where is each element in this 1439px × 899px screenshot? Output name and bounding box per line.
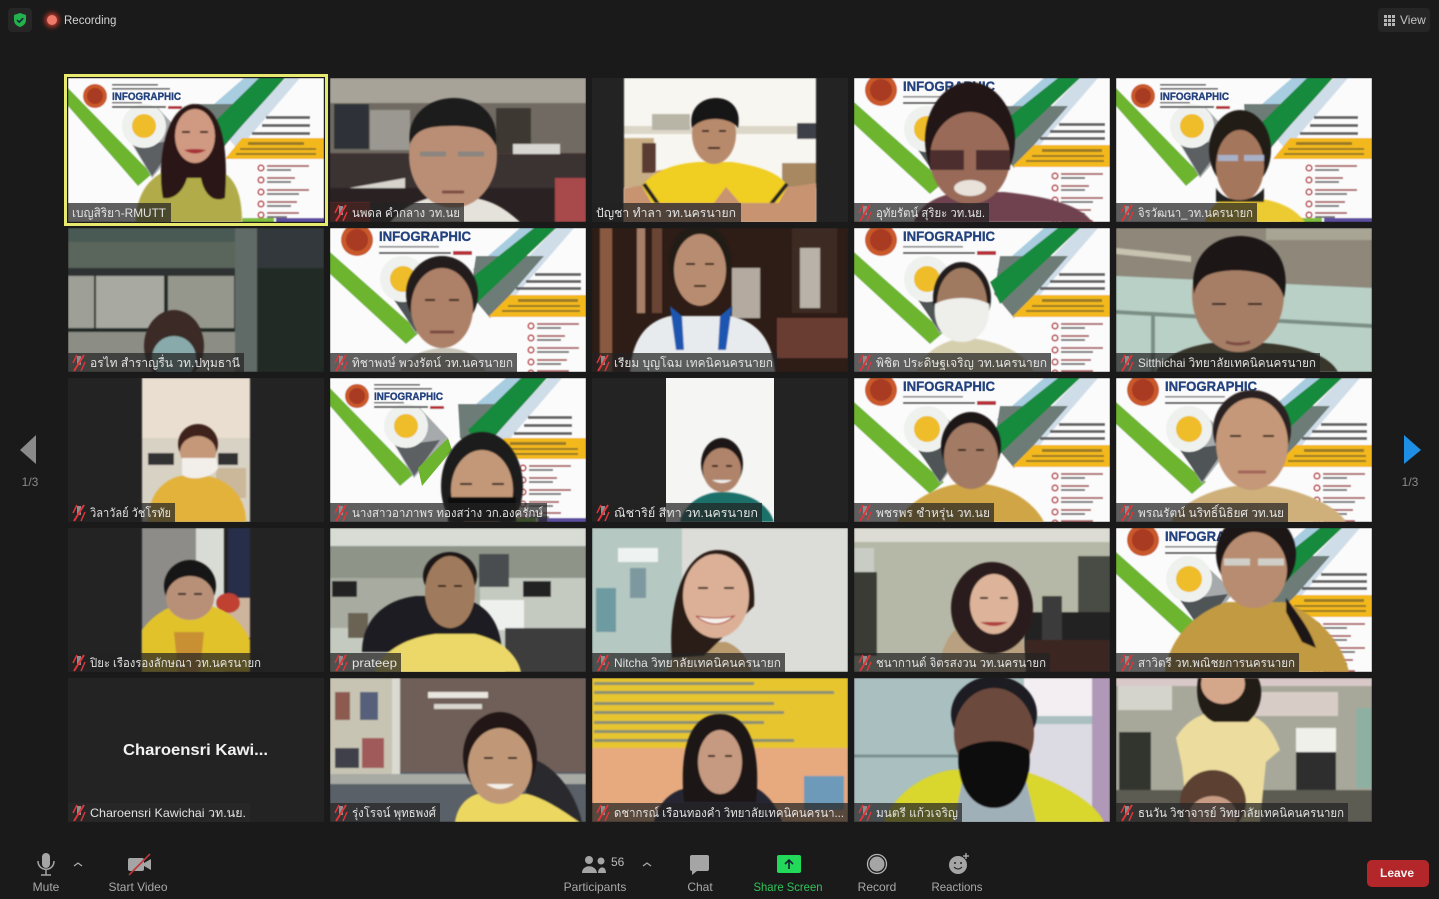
name label: อุทัยรัตน์ สุริยะ วท.นย. <box>876 206 985 221</box>
name label: พรณรัตน์ นริทธิ์นิธิยศ วท.นย <box>1138 504 1284 520</box>
name label: prateep <box>352 656 397 670</box>
toolbar: start video button: Start Video <box>108 880 168 894</box>
name label <box>854 653 1050 672</box>
name label: Sitthichai วิทยาลัยเทคนิคนครนายก <box>1138 356 1316 370</box>
leave button <box>1367 860 1429 887</box>
name label <box>592 203 741 222</box>
ceiling and teal wall <box>1116 228 1372 372</box>
name label: ชนากานต์ จิตรสงวน วท.นครนายก <box>876 656 1046 670</box>
person <box>940 562 1033 672</box>
person <box>1156 236 1338 372</box>
tile: พิชิต <box>854 224 1110 377</box>
name label <box>592 353 777 372</box>
wood cabinet background <box>592 228 848 372</box>
name label: ดชากรณ์ เรือนทองคำ วิทยาลัยเทคนิคนครนา... <box>614 806 844 820</box>
toolbar: reactions button: Reactions <box>932 880 982 894</box>
name label <box>68 653 265 672</box>
leave button: Leave <box>1380 866 1414 880</box>
tile: จิรวัฒนา: INFOGRAPHIC <box>1160 91 1229 103</box>
person <box>1171 390 1346 522</box>
tile: Sitthichai <box>1116 228 1372 372</box>
toolbar: record button: Record <box>858 880 896 894</box>
person <box>897 412 1044 522</box>
name label <box>854 353 1051 372</box>
name label <box>68 203 171 222</box>
cropped video <box>142 528 250 672</box>
tile: พชรพร <box>854 374 1110 527</box>
toolbar: chat button <box>687 855 713 894</box>
cropped video <box>142 378 250 522</box>
name label <box>1116 653 1299 672</box>
name label: Charoensri Kawichai วท.นย. <box>90 806 246 820</box>
name label: นางสาวอาภาพร ทองสว่าง วก.องครักษ์ <box>352 506 543 520</box>
name label: เรียม บุญโฉม เทคนิคนครนายก <box>614 356 773 371</box>
cropped video <box>666 378 774 522</box>
name label <box>592 503 762 522</box>
display name: Charoensri Kawi... <box>123 742 268 759</box>
security shield icon <box>8 8 32 32</box>
next page arrow <box>1402 435 1421 489</box>
tile: ทิชาพงษ์ <box>330 224 586 377</box>
tile: สาวิตรี <box>1116 512 1372 677</box>
name label <box>1116 803 1348 822</box>
person <box>917 262 1034 372</box>
tile: ปัญชา <box>592 78 848 222</box>
view button <box>1378 8 1430 32</box>
cropped video <box>624 78 816 222</box>
name label <box>330 653 401 672</box>
room with display board <box>330 678 586 822</box>
toolbar: mute button <box>33 853 82 894</box>
tile: วิลาวัลย์ <box>68 378 324 522</box>
office background <box>330 528 586 672</box>
person <box>630 224 775 372</box>
person <box>884 676 1104 822</box>
pale wall background <box>592 528 848 672</box>
name label <box>68 353 244 372</box>
person <box>142 560 250 672</box>
person <box>390 98 520 222</box>
tile: นพดล <box>330 78 586 222</box>
name label: ปัญชา ทำลา วท.นครนายก <box>596 206 736 220</box>
person <box>668 550 754 672</box>
person <box>455 712 582 822</box>
name label: ณิชาริย์ สีทา วท.นครนายก <box>614 506 758 520</box>
person <box>1165 512 1349 672</box>
name label: พชรพร ชำหรุ่น วท.นย <box>876 506 990 521</box>
person <box>144 310 204 382</box>
toolbar: share screen button: Share Screen <box>754 880 822 894</box>
name label <box>1116 203 1257 222</box>
name label <box>68 803 250 822</box>
next page arrow: 1/3 <box>1402 475 1419 489</box>
toolbar: chat button: Chat <box>687 880 713 894</box>
tile: พชรพร: INFOGRAPHIC <box>903 378 995 394</box>
toolbar: share screen button <box>754 855 822 894</box>
name label: มนตรี แก้วเจริญ <box>876 806 958 820</box>
tile: ชนากานต์ <box>854 528 1110 672</box>
name label: สาวิตรี วท.พณิชยการนครนายก <box>1138 656 1295 670</box>
person <box>624 98 816 222</box>
active speaker border <box>66 76 326 224</box>
name label: ธนวัน วิชาจารย์ วิทยาลัยเทคนิคนครนายก <box>1138 806 1344 820</box>
tile: สาวิตรี: INFOGRAPHIC <box>1165 528 1257 544</box>
previous page arrow: 1/3 <box>22 475 39 489</box>
name label: รุ่งโรจน์ พุทธพงศ์ <box>352 806 436 821</box>
tile: presenter เบญสิริยา <box>68 78 324 222</box>
name label <box>68 503 175 522</box>
recording indicator <box>45 13 116 27</box>
pale wall background <box>854 678 1110 822</box>
name label: อรไท สำราญรื่น วท.ปทุมธานี <box>90 354 240 371</box>
tile: ณิชาริย์ <box>592 378 848 522</box>
tile: มนตรี <box>854 676 1110 822</box>
recording indicator: Recording <box>64 15 116 27</box>
tile: presenter เบญสิริยา: INFOGRAPHIC <box>112 91 181 103</box>
tile: ทิชาพงษ์: INFOGRAPHIC <box>379 228 471 244</box>
tile: พรณรัตน์ <box>1116 374 1372 527</box>
tile: พิชิต: INFOGRAPHIC <box>903 228 995 244</box>
name label <box>1116 503 1288 522</box>
name label: พิชิต ประดิษฐเจริญ วท.นครนายก <box>876 356 1047 370</box>
person <box>914 82 1092 222</box>
toolbar: participants button <box>564 855 651 894</box>
name label: เบญสิริยา-RMUTT <box>72 206 167 220</box>
tile: อุทัยรัตน์: INFOGRAPHIC <box>903 78 995 94</box>
tile: อาภาพร: INFOGRAPHIC <box>374 391 443 403</box>
people <box>1176 664 1280 836</box>
name label: Nitcha วิทยาลัยเทคนิคนครนายก <box>614 656 781 670</box>
person <box>1205 110 1305 222</box>
tile: เรียม <box>592 224 848 372</box>
tile: พรณรัตน์: INFOGRAPHIC <box>1165 378 1257 394</box>
tile: รุ่งโรจน์ <box>330 678 586 822</box>
name label <box>1116 353 1320 372</box>
name label: วิลาวัลย์ วัชโรทัย <box>90 506 171 520</box>
tile: ดชากรณ์ <box>592 678 848 822</box>
toolbar: start video button <box>108 854 168 894</box>
tile: อรไท <box>68 228 324 382</box>
name label <box>854 503 994 522</box>
room with window <box>68 228 324 372</box>
tile: prateep <box>330 528 586 672</box>
toolbar: participants button: 56 <box>611 855 625 869</box>
name label <box>854 803 962 822</box>
person <box>680 438 774 522</box>
tile: Charoensri Kawichai <box>68 678 324 822</box>
tile: Nitcha <box>592 528 848 672</box>
yellow banner and peach wall <box>592 678 848 822</box>
name label <box>592 803 848 822</box>
person <box>362 552 521 672</box>
name label: ปิยะ เรืองรองลักษณา วท.นครนายก <box>89 656 261 670</box>
person <box>654 714 782 822</box>
person <box>400 256 486 372</box>
name label <box>330 503 547 522</box>
toolbar: reactions button <box>932 853 982 894</box>
tile: อุทัยรัตน์ <box>854 74 1110 227</box>
person <box>136 104 242 222</box>
toolbar: mute button: Mute <box>33 880 60 894</box>
person <box>441 432 523 540</box>
previous page arrow <box>20 435 39 489</box>
toolbar: participants button: Participants <box>564 880 626 894</box>
tile: ธนวัน <box>1116 664 1372 836</box>
office background <box>330 78 586 222</box>
view button: View <box>1400 13 1426 27</box>
tile: อาภาพร <box>330 378 586 522</box>
name label: ทิชาพงษ์ พวงรัตน์ วท.นครนายก <box>352 356 513 370</box>
name label <box>330 803 440 822</box>
classroom background <box>854 528 1110 672</box>
name label: จิรวัฒนา_วท.นครนายก <box>1138 206 1253 220</box>
tile: ปิยะ <box>68 528 324 672</box>
name label <box>330 203 464 222</box>
name label <box>592 653 785 672</box>
name label <box>330 353 517 372</box>
name label: นพดล คำกลาง วท.นย <box>352 206 460 220</box>
person <box>148 424 246 522</box>
hall background <box>1116 678 1372 822</box>
tile: จิรวัฒนา <box>1116 78 1372 222</box>
toolbar: record button <box>858 854 896 894</box>
name label <box>854 203 989 222</box>
